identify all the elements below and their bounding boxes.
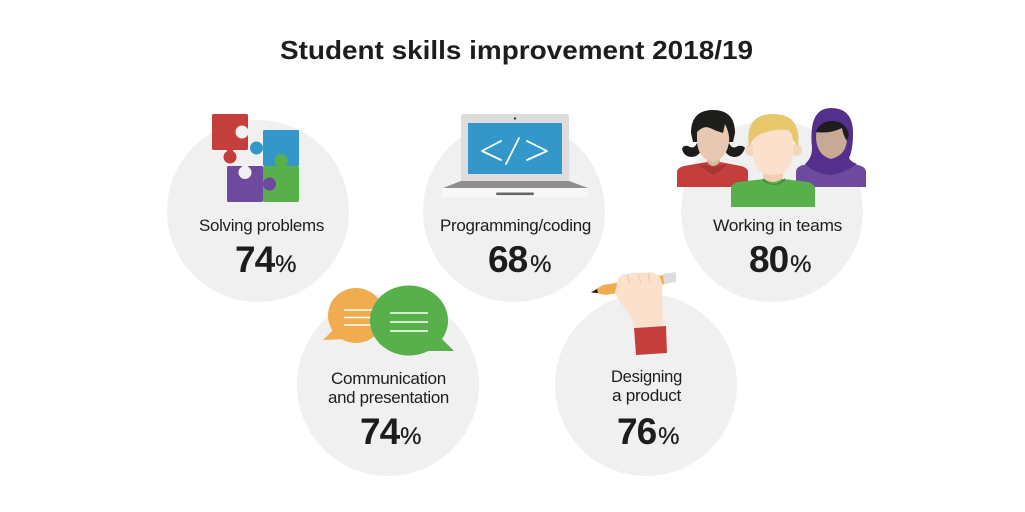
panel: solving problems: [167, 114, 349, 302]
label: working in teams: Working in teams: [713, 216, 842, 235]
icon: laptop: [442, 114, 588, 197]
value: 76%: 76%: [617, 411, 680, 452]
label: solving problems: Solving problems: [199, 216, 324, 235]
person: left: [677, 110, 748, 187]
value: 68%: 68%: [488, 239, 552, 280]
label: communication and presentation: and presentation: [328, 388, 449, 407]
title: Student skills improvement 2018/19: [280, 35, 753, 65]
label: designing a product: Designing: [611, 367, 682, 386]
label: communication and presentation: [328, 369, 449, 407]
value: 74%: 74%: [360, 411, 422, 452]
panel: designing a product: [555, 272, 737, 476]
icon: three people: [677, 108, 866, 207]
label: communication and presentation: Communication: [331, 369, 446, 388]
icon: puzzle: [212, 114, 299, 202]
value: 80%: 80%: [749, 239, 812, 280]
panel: communication and presentation: [297, 286, 479, 476]
label: designing a product: [611, 367, 682, 405]
icon: speech bubbles: [323, 286, 454, 356]
person: centre: [731, 114, 815, 207]
label: designing a product: a product: [612, 386, 682, 405]
icon: hand with pencil: [591, 272, 676, 355]
value: 74%: 74%: [235, 239, 296, 280]
person: right: [796, 108, 866, 187]
panel: working in teams: [677, 108, 866, 302]
panel: programming/coding: [423, 114, 605, 302]
label: programming/coding: Programming/coding: [440, 216, 591, 235]
